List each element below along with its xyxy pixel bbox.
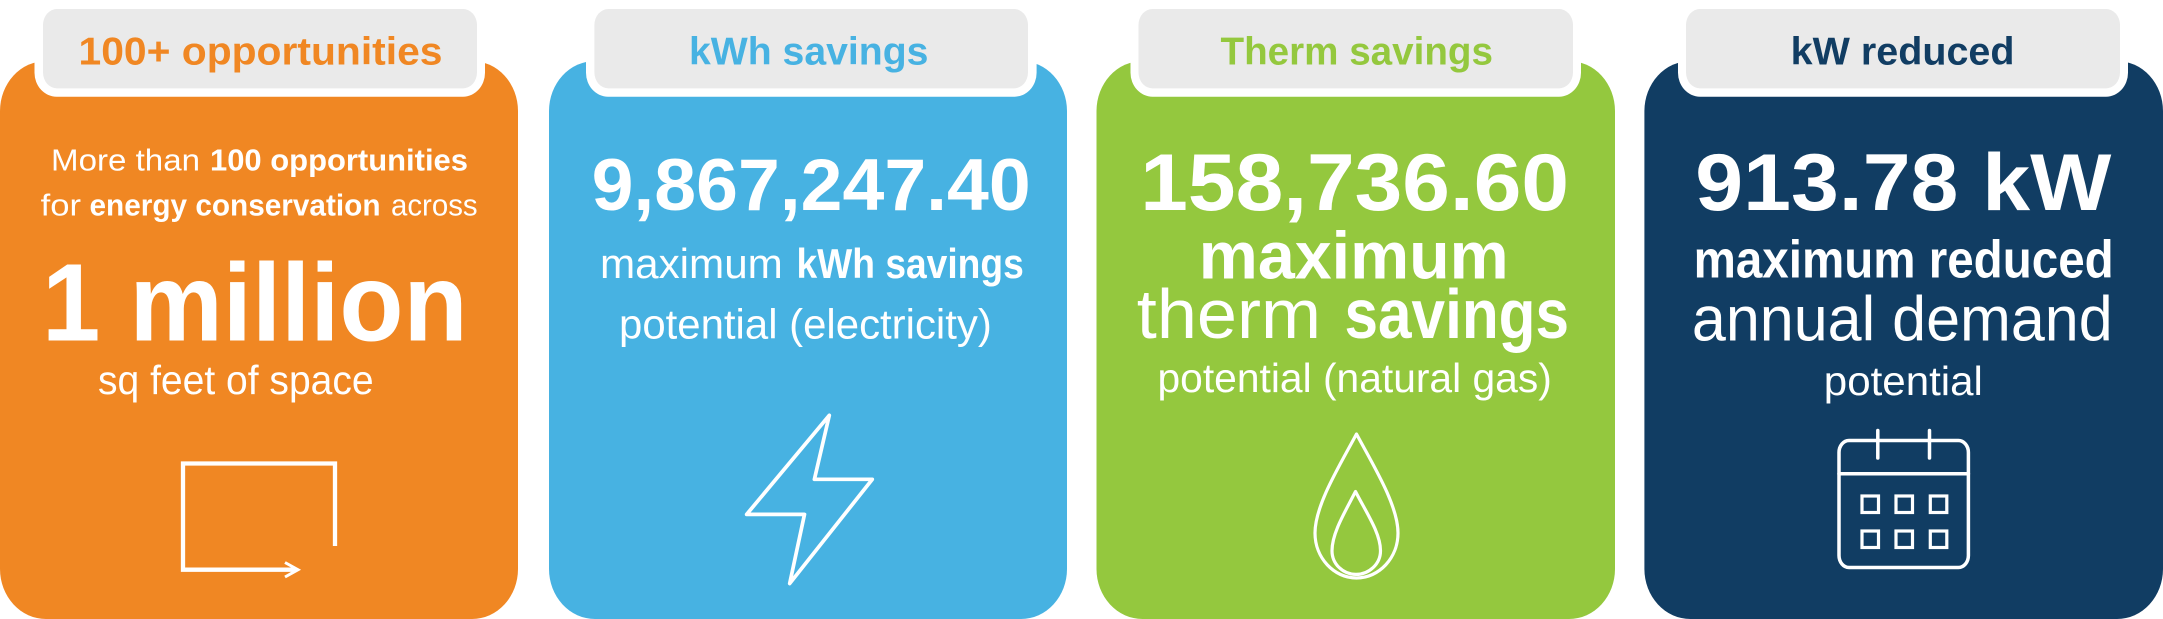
text: more than 100 opportunities: More than <box>51 142 200 178</box>
panel: kW reduced <box>1644 0 2163 619</box>
card background green <box>1096 61 1615 619</box>
tab <box>594 9 1028 88</box>
text: for energy conservation across: across <box>391 188 478 222</box>
text: more than 100 opportunities <box>51 142 468 178</box>
text: for energy conservation across: energy conservation <box>90 188 380 222</box>
tab cutout <box>34 0 485 97</box>
text: maximum kWh savings <box>600 240 1024 287</box>
text: potential (natural gas): potential (natural gas) <box>1158 355 1552 401</box>
icon: lightning bolt <box>747 415 872 584</box>
heading: Therm savings <box>1220 30 1493 74</box>
tab cutout <box>586 0 1037 97</box>
card background orange <box>0 61 518 619</box>
text: maximum kWh savings: maximum <box>600 240 783 287</box>
text: annual demand: annual demand <box>1692 285 2113 355</box>
text: therm savings <box>1137 275 1569 353</box>
tab cutout <box>1130 0 1581 97</box>
big number: 9,867,247.40 <box>592 145 1031 226</box>
panel: kWh savings <box>549 0 1067 619</box>
text: potential (electricity): potential (electricity) <box>619 301 992 348</box>
card background blue <box>549 61 1067 619</box>
text: maximum reduced: maximum reduced <box>1694 230 2114 290</box>
text: for energy conservation across <box>41 188 478 222</box>
card background navy <box>1644 61 2163 619</box>
icon: square footage outline with arrow <box>183 464 335 577</box>
text: therm savings: therm <box>1137 275 1321 353</box>
tab <box>43 9 477 88</box>
tab <box>1138 9 1573 88</box>
icon: gas flame <box>1315 434 1398 578</box>
text: maximum kWh savings: kWh savings <box>796 240 1024 287</box>
text: therm savings: savings <box>1344 275 1569 353</box>
big number: 913.78 kW <box>1695 138 2112 228</box>
tab <box>1686 9 2120 88</box>
text: potential: potential <box>1824 358 1983 404</box>
icon: calendar <box>1839 430 1968 568</box>
big number: 1 million: 1 million <box>42 241 468 364</box>
tab cutout <box>1678 0 2128 97</box>
text: more than 100 opportunities: 100 opportunities <box>210 142 468 178</box>
heading: kWh savings <box>689 30 928 74</box>
text: for energy conservation across: for <box>41 188 81 222</box>
big number: 158,736.60 <box>1140 138 1569 228</box>
panel: Therm savings <box>1096 0 1615 619</box>
text: maximum: maximum <box>1199 219 1509 294</box>
panel: 100+ opportunities <box>0 0 518 619</box>
heading: 100+ opportunities <box>78 30 442 74</box>
heading: kW reduced <box>1791 30 2014 74</box>
text: sq feet of space: sq feet of space <box>98 357 374 403</box>
